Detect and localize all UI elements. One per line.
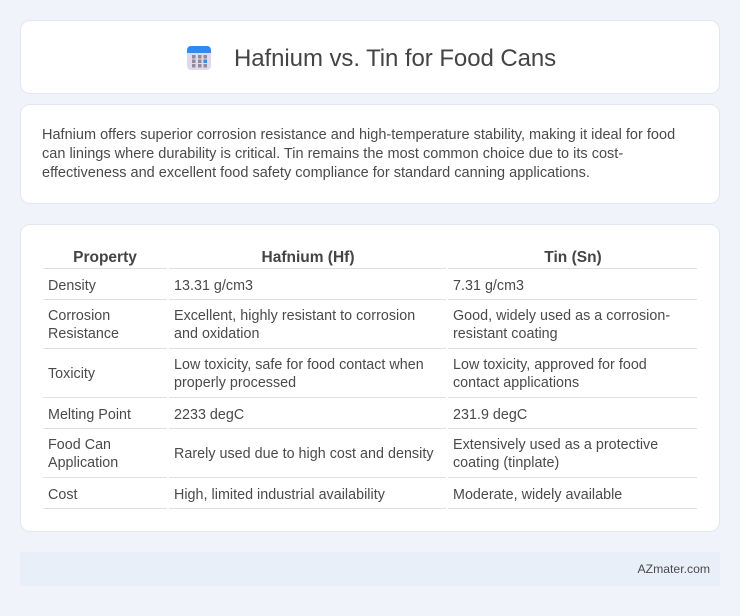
icon: calendar [187, 46, 211, 70]
summary text [42, 127, 675, 181]
row: food can application: Extensively used as a protective [453, 437, 658, 453]
table header: Hafnium (Hf) [262, 249, 354, 266]
row: toxicity: contact applications [453, 375, 579, 391]
row: corrosion resistance: Good, widely used as a corrosion- [453, 308, 670, 324]
row: cost: High, limited industrial availability [174, 487, 385, 503]
panel: summary [20, 104, 720, 204]
row: corrosion resistance [48, 308, 670, 342]
row: corrosion resistance: Excellent, highly resistant to corrosion [174, 308, 415, 324]
summary text: can linings where durability is critical. Tin remains the most common choice due to its cost- [42, 146, 623, 162]
row: melting point [48, 407, 527, 423]
row: cost [48, 487, 622, 503]
row: melting point: 2233 degC [174, 407, 244, 423]
row: corrosion resistance: resistant coating [453, 326, 558, 342]
row: corrosion resistance: Resistance [48, 326, 119, 342]
row: melting point: 231.9 degC [453, 407, 527, 423]
row: corrosion resistance: and oxidation [174, 326, 259, 342]
table header [73, 249, 602, 266]
row: food can application: Rarely used due to high cost and density [174, 446, 434, 462]
row: toxicity [48, 357, 647, 391]
panel: comparison table [20, 224, 720, 532]
row: toxicity: Low toxicity, approved for food [453, 357, 647, 373]
row: toxicity: Low toxicity, safe for food contact when [174, 357, 424, 373]
panel: title header [20, 20, 720, 94]
row: density: 7.31 g/cm3 [453, 278, 524, 294]
row: cost: Cost [48, 487, 78, 503]
summary text: Hafnium offers superior corrosion resistance and high-temperature stability, making it ideal for food [42, 127, 675, 143]
row: density [48, 278, 524, 294]
table header: Property [73, 249, 137, 266]
row: food can application: coating (tinplate) [453, 455, 559, 471]
row: density: 13.31 g/cm3 [174, 278, 253, 294]
row: food can application: Food Can [48, 437, 111, 453]
title: Hafnium vs. Tin for Food Cans [234, 45, 556, 72]
row: cost: Moderate, widely available [453, 487, 622, 503]
row: corrosion resistance: Corrosion [48, 308, 110, 324]
row: melting point: Melting Point [48, 407, 131, 423]
row: food can application [48, 437, 658, 471]
row: toxicity: properly processed [174, 375, 296, 391]
row: toxicity: Toxicity [48, 366, 95, 382]
summary text: effectiveness and excellent food safety compliance for standard canning applications. [42, 165, 590, 181]
row: food can application: Application [48, 455, 118, 471]
footer credit: AZmater.com [638, 562, 710, 576]
table header: Tin (Sn) [544, 249, 602, 266]
row: density: Density [48, 278, 96, 294]
footer bar [20, 552, 720, 586]
